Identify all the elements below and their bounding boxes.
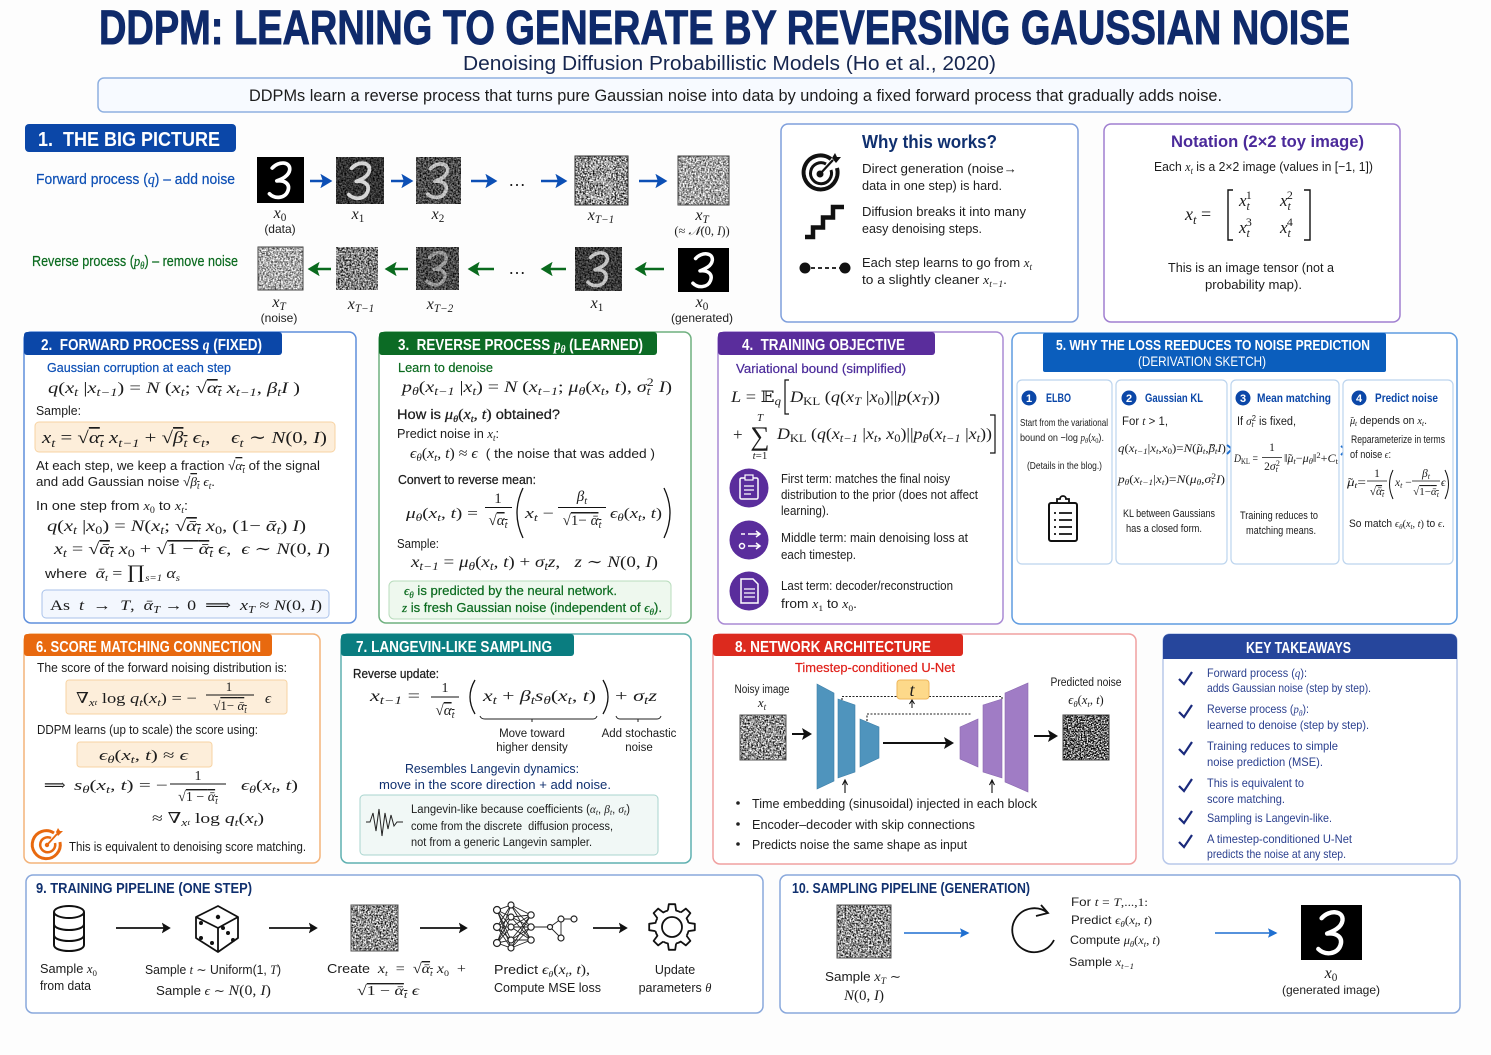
- text: each step keep: and add Gaussian noise √ βt ϵt.: [36, 474, 215, 491]
- label: generated x0: x0: [1324, 965, 1338, 984]
- heading: 10. SAMPLING PIPELINE (GENERATION): [792, 881, 1030, 897]
- text: predict and mse: [494, 963, 601, 995]
- text: score intro: The score of the forward noising distribution is:: [37, 661, 287, 675]
- card: ELBO: Start from the variational: [1020, 417, 1108, 429]
- card: ELBO: 1: [1026, 393, 1032, 405]
- brace: stochastic noise: [616, 716, 661, 722]
- reverse labels: [261, 294, 733, 325]
- text: sample t and epsilon: Sample t ∼ Uniform(1, T): [145, 963, 281, 977]
- text: reverse update: Reverse update:: [353, 667, 439, 681]
- heading: (DERIVATION SKETCH): [1138, 353, 1266, 369]
- summary banner: DDPMs learn a reverse process that turns pure Gaussian noise into data by undoing a fixed forward process that gradually adds noise.: [249, 86, 1222, 105]
- text: sample xT: Sample xT ∼: [825, 969, 901, 986]
- text: diffusion breaks: [862, 204, 1026, 236]
- heading: 4. TRAINING OBJECTIVE: [742, 337, 905, 354]
- equation: reverse mean: μθ(xt, t) =: [405, 506, 478, 524]
- icon: stairs: [805, 207, 844, 237]
- equation: variational bound: t=1: [753, 450, 767, 462]
- text: loop steps: Predict ϵθ(xt, t): [1071, 913, 1152, 929]
- subtitle: Denoising Diffusion Probabillistic Models (Ho et al., 2020): [463, 53, 996, 75]
- card: Gaussian KL: For t > 1,: [1122, 416, 1168, 428]
- matrix: xt1: [1238, 188, 1252, 213]
- reverse labels: x0: [695, 294, 709, 313]
- text: predict and mse: Compute MSE loss: [494, 981, 601, 995]
- text: direct generation: data in one step) is hard.: [862, 178, 1002, 193]
- icon: two dots dashed link: [800, 262, 850, 274]
- bullets: [736, 796, 1037, 852]
- reverse arrows: [310, 268, 664, 270]
- text: loop steps: Compute μθ(xt, t): [1070, 933, 1160, 949]
- equation: reverse mean: xt −: [524, 506, 554, 524]
- text: resembles langevin: Resembles Langevin dynamics:: [405, 761, 579, 776]
- heading: 6. SCORE MATCHING CONNECTION: [36, 639, 261, 656]
- arrow: card 2 to 3: [1227, 445, 1232, 454]
- text: sample x0: [40, 962, 98, 993]
- timestep box: [897, 680, 929, 700]
- text: diffusion breaks: Diffusion breaks it into many: [862, 204, 1026, 219]
- forward process label: Forward process (q) – add noise: [36, 171, 235, 188]
- forward labels: xT−1: [587, 207, 614, 226]
- card: mean matching: 1: [1269, 442, 1275, 454]
- card: mean matching: matching means.: [1246, 525, 1316, 537]
- reverse labels: xT−1: [347, 296, 374, 315]
- panel: 5. why the loss reduces: [1012, 333, 1457, 624]
- equation: update: + σ tz: [615, 688, 658, 707]
- panel: 1. the big picture: [25, 124, 733, 325]
- arrow: [420, 927, 466, 929]
- text: sample t and epsilon: Sample ϵ ∼ N(0, I): [156, 983, 271, 999]
- callout: langevin note: Langevin-like because coefficients (αt, βt, σt): [411, 804, 630, 817]
- question: how is mu obtained: How is μθ(xt, t) obtained?: [397, 407, 560, 425]
- callout: langevin note: come from the discrete diffusion process,: [411, 821, 613, 833]
- equation: alpha bar: where ᾱt = ∏ s=1 αs: [44, 562, 181, 583]
- takeaway list: predicts the noise at any step.: [1207, 847, 1346, 861]
- text: direct generation: [862, 161, 1017, 193]
- reverse labels: x1: [590, 295, 603, 314]
- label: stochastic noise: noise: [625, 742, 653, 754]
- card: mean matching: Mean matching: [1257, 391, 1331, 405]
- timestep box: t: [909, 680, 915, 700]
- text: create xt: [327, 962, 466, 1001]
- text: last term: [781, 579, 953, 613]
- icon: dice: [196, 906, 238, 952]
- heading: 9. TRAINING PIPELINE (ONE STEP): [36, 881, 252, 897]
- text: sample xT: N(0, I): [843, 988, 884, 1004]
- equation: variational bound: ∑: [750, 421, 770, 451]
- equation: variational bound: DKL (q(xt−1 |xt, x0)||pθ(xt−1 |xt)): [776, 426, 992, 445]
- card: Gaussian KL: KL between Gaussians: [1123, 508, 1215, 520]
- equation: marginal: q(xt |x0) = N(xt; √ ᾱt x0, (1− ᾱt) I): [47, 518, 306, 537]
- takeaway list: noise prediction (MSE).: [1207, 755, 1323, 769]
- icon: database: [54, 906, 84, 951]
- equation: reverse mean: √αt: [488, 513, 509, 531]
- icon: middle term arrows: [730, 520, 768, 560]
- panel: why this works: [781, 124, 1078, 322]
- bullets: Encoder–decoder with skip connections: [752, 817, 975, 832]
- text: middle term: Middle term: main denoising loss at: [781, 531, 968, 545]
- callout: sampling equation: [35, 422, 335, 452]
- bullets: Predicts noise the same shape as input: [752, 837, 967, 852]
- callout: limit: [42, 590, 329, 618]
- card: predict noise: μ˜ t=: [1346, 477, 1366, 490]
- card: mean matching: [1231, 380, 1339, 564]
- equation: reverse mean: [405, 488, 670, 538]
- callout: score formula: 1: [226, 679, 232, 694]
- takeaway list: adds Gaussian noise (step by step).: [1207, 681, 1371, 695]
- card: mean matching: 3: [1240, 393, 1246, 405]
- matrix: xt3: [1238, 215, 1252, 240]
- text: first term: [781, 472, 978, 518]
- text: image tensor note: probability map).: [1205, 277, 1302, 292]
- text: first term: distribution to the prior (does not affect: [781, 488, 978, 502]
- text: each xt: Each xt is a 2×2 image (values in [−1, 1]): [1154, 159, 1373, 176]
- callout: epsilon and z note: [389, 581, 671, 619]
- icon: last term document: [730, 572, 768, 610]
- equation: s theta: sθ(x t, t) = −: [74, 778, 168, 796]
- heading: why this works: Why this works?: [862, 131, 997, 152]
- text: each step: Each step learns to go from xt: [862, 255, 1032, 272]
- label: stochastic noise: [602, 728, 677, 754]
- equation: update: 1: [442, 681, 448, 696]
- card: mean matching: If σt2 is fixed,: [1237, 414, 1296, 429]
- label: predicted noise: ϵθ(xt, t): [1068, 693, 1104, 709]
- forward labels: (data): [264, 222, 296, 236]
- equation: reparameterised: xt = √ ᾱt x0 + √ 1 − ᾱt ϵ, ϵ ∼ N(0, I): [53, 541, 330, 560]
- heading: [713, 634, 963, 656]
- callout: score formula: [66, 679, 287, 715]
- card: Gaussian KL: has a closed form.: [1126, 523, 1202, 535]
- card: Gaussian KL: 2: [1126, 393, 1132, 405]
- generated image: [1301, 905, 1362, 960]
- heading: [1043, 333, 1386, 372]
- text: loop steps: [1069, 895, 1160, 971]
- text: ddpm learns: DDPM learns (up to scale) the score using:: [37, 723, 258, 737]
- heading: 2. FORWARD PROCESS q (FIXED): [41, 337, 262, 354]
- text: each step keep: [36, 458, 320, 491]
- text: each step keep: At each step, we keep a fraction √ αt of the signal: [36, 458, 320, 475]
- text: first term: learning).: [781, 504, 829, 518]
- forward arrows: [310, 180, 665, 182]
- heading: notation: Notation (2×2 toy image): [1171, 132, 1364, 151]
- reverse labels: xT: [271, 294, 286, 313]
- panel: 2. forward process: [24, 332, 356, 623]
- matrix: xt2: [1279, 188, 1293, 213]
- equation: s theta: [44, 769, 298, 829]
- panel: 9. training pipeline: [26, 875, 763, 1013]
- equation: p: pθ(xt−1 |xt) = N (xt−1; μθ(xt, t), σt2 I): [401, 377, 672, 398]
- matrix: xt4: [1279, 215, 1293, 240]
- panel: key takeaways: [1163, 634, 1457, 864]
- text: first term: First term: matches the final noisy: [781, 472, 951, 486]
- card: Gaussian KL: Gaussian KL: [1145, 391, 1203, 405]
- equation: s theta: ≈ ∇ xt log qt(xt): [152, 811, 264, 829]
- heading: 5. WHY THE LOSS REEDUCES TO NOISE PREDICTION: [1056, 338, 1370, 354]
- equation: reverse mean: ϵθ(xt, t): [610, 506, 662, 524]
- heading: 7. LANGEVIN-LIKE SAMPLING: [356, 639, 552, 656]
- panel: 6. score matching: [24, 634, 320, 863]
- equation: update: xt−1 =: [369, 688, 420, 707]
- text: sample t and epsilon: [145, 963, 281, 999]
- card: ELBO: (Details in the blog.): [1027, 460, 1102, 472]
- text: sample xT: [825, 969, 901, 1004]
- takeaway list: Training reduces to simple: [1207, 739, 1338, 753]
- text: update parameters: [639, 963, 711, 995]
- text: sample x0: from data: [40, 979, 91, 993]
- label: predicted noise: Predicted noise: [1050, 677, 1122, 689]
- arrow: [904, 932, 968, 934]
- equation: update: xt + β tsθ(xt, t): [482, 688, 596, 707]
- equation: reverse mean: βt: [576, 489, 588, 507]
- card: Gaussian KL: q(xt−1|xt,x0)=N(μ˜t,β˜tI): [1118, 443, 1226, 456]
- arrow: [1215, 932, 1276, 934]
- callout: sampling equation: xt = √ αt xt−1 + √ βt ϵt, ϵt ∼ N(0, I): [41, 428, 327, 450]
- card: mean matching: DKL =: [1233, 453, 1258, 466]
- equation: s theta: √1 − ᾱt: [178, 790, 218, 807]
- reverse labels: (noise): [261, 311, 297, 325]
- card: ELBO: ELBO: [1046, 391, 1071, 405]
- takeaway list: This is equivalent to: [1207, 776, 1304, 790]
- card: predict noise: 1: [1374, 468, 1380, 480]
- forward labels: xT: [694, 207, 709, 226]
- equation: s theta: ⟹: [44, 778, 66, 794]
- takeaway list: A timestep-conditioned U-Net: [1207, 832, 1353, 846]
- text: last term: Last term: decoder/reconstruction: [781, 579, 953, 593]
- text: predict noise: Predict noise in xt:: [397, 426, 499, 443]
- heading: 3. REVERSE PROCESS pθ (LEARNED): [398, 337, 643, 356]
- card: predict noise: of noise ϵ:: [1350, 449, 1391, 461]
- reverse process label: Reverse process (pθ) – remove noise: [32, 253, 238, 272]
- subheading: Timestep-conditioned U-Net: [795, 661, 956, 675]
- text: resembles langevin: move in the score direction + add noise.: [379, 777, 611, 792]
- card: predict noise: ϵ: [1441, 477, 1446, 489]
- label: move toward: higher density: [496, 742, 568, 754]
- icon: gear: [649, 904, 695, 950]
- callout: epsilon and z note: ϵθ is predicted by the neural network.: [404, 583, 617, 600]
- forward image sequence: [257, 156, 729, 205]
- text: resembles langevin: [379, 761, 611, 792]
- callout: score formula: ∇xt log qt(xt) = −: [76, 691, 197, 709]
- text: equivalent note: This is equivalent to denoising score matching.: [69, 840, 306, 854]
- equation: s theta: ϵθ(xt, t): [241, 778, 298, 796]
- panel: 10. sampling pipeline: [780, 875, 1460, 1013]
- card: ELBO: bound on −log pθ(x0).: [1020, 432, 1104, 445]
- callout: score formula: ϵ: [265, 691, 272, 707]
- label: generated x0: (generated image): [1282, 983, 1380, 997]
- equation: s theta: 1: [194, 769, 202, 784]
- label: noisy image: [734, 684, 790, 712]
- panel: 4. training objective: [718, 332, 1003, 624]
- noise image xT: [837, 905, 891, 958]
- card: predict noise: Predict noise: [1375, 391, 1438, 405]
- reverse ellipsis: …: [508, 258, 526, 278]
- forward labels: x2: [431, 206, 444, 225]
- callout: limit: As t → T, ᾱT → 0 ⟹ xT ≈ N(0, I): [50, 598, 322, 616]
- label: move toward: Move toward: [499, 728, 565, 740]
- forward labels: (≈ 𝒩(0, I)): [674, 224, 730, 238]
- icon: noise wave: [366, 809, 403, 836]
- arrow: [269, 927, 316, 929]
- equation: variational bound: T: [757, 412, 764, 424]
- text: create xt: Create xt = √ᾱt x0 +: [327, 962, 466, 978]
- card: Gaussian KL: [1116, 380, 1227, 564]
- callout: epsilon and z note: z is fresh Gaussian noise (independent of ϵθ).: [401, 600, 662, 617]
- text: direct generation: Direct generation (noise→: [862, 161, 1017, 176]
- text: in one step: In one step from x0 to xt:: [36, 498, 188, 515]
- icon: target: [804, 153, 841, 189]
- reverse labels: xT−2: [426, 296, 454, 315]
- encoder blocks: [817, 684, 879, 789]
- takeaway list: learned to denoise (step by step).: [1207, 718, 1369, 732]
- heading: the big picture: 1. THE BIG PICTURE: [38, 129, 220, 151]
- text: predict and mse: Predict ϵθ(xt, t),: [494, 963, 590, 979]
- panel: 8. network architecture: [713, 634, 1136, 864]
- text: loop steps: For t = T,...,1:: [1071, 895, 1148, 909]
- label: move toward: [496, 728, 568, 754]
- equation: reverse mean: √1− ᾱt: [563, 513, 602, 531]
- arrow: [116, 927, 169, 929]
- heading: KEY TAKEAWAYS: [1246, 640, 1351, 657]
- subheading: Variational bound (simplified): [736, 361, 906, 376]
- text: update parameters: Update: [655, 963, 695, 977]
- card: predict noise: βt: [1421, 468, 1431, 481]
- panel: notation: [1104, 124, 1400, 322]
- card: predict noise: √ᾱt: [1370, 485, 1385, 499]
- label: sample: Sample:: [397, 536, 439, 551]
- icon: clipboard: [1049, 496, 1077, 541]
- text: last term: from x1 to x0.: [781, 597, 857, 613]
- label: stochastic noise: Add stochastic: [602, 728, 677, 740]
- label: noisy image: xt: [757, 695, 767, 712]
- card: predict noise: 4: [1356, 393, 1363, 405]
- card: Gaussian KL: pθ(xt−1|xt)=N(μθ,σt2I): [1117, 472, 1225, 487]
- text: each step: to a slightly cleaner xt−1.: [862, 272, 1007, 289]
- subheading: Learn to denoise: [398, 360, 493, 375]
- icon: neural network: [494, 902, 577, 951]
- forward ellipsis: …: [508, 170, 526, 190]
- forward labels: x1: [351, 206, 364, 225]
- equation: sample: xt−1 = μθ(xt, t) + σtz, z ∼ N(0, I): [410, 554, 658, 573]
- equation: reverse mean: 1: [494, 491, 502, 507]
- card: predict noise: √1−ᾱt: [1413, 486, 1440, 499]
- text: create xt: √1 − ᾱt ϵ: [357, 984, 421, 1001]
- matrix: xt =: [1184, 204, 1211, 227]
- icon: loop arrow: [1012, 905, 1054, 952]
- panel: 3. reverse process: [379, 332, 691, 623]
- summary banner: [98, 78, 1352, 112]
- callout: score formula: √1− ᾱt: [213, 698, 247, 715]
- callout: langevin note: [360, 795, 658, 855]
- icon: orange target: [32, 828, 63, 859]
- card: mean matching: ‖μ˜t−μθ‖2+Ct: [1284, 451, 1339, 466]
- skip connections: [842, 696, 1002, 721]
- text: middle term: each timestep.: [781, 548, 856, 562]
- arrow: [593, 927, 626, 929]
- forward labels: x0: [273, 205, 287, 224]
- heading: [1163, 634, 1457, 659]
- noise image: [351, 905, 398, 951]
- heading: 8. NETWORK ARCHITECTURE: [735, 639, 931, 656]
- label: noisy image: Noisy image: [734, 684, 790, 696]
- text: image tensor note: This is an image tensor (not a: [1168, 260, 1335, 275]
- text: middle term: [781, 531, 968, 562]
- equation: q step: q(xt |xt−1 ) = N (xt; √ αt xt−1 , βtI ): [48, 380, 300, 399]
- callout: epsilon: [77, 742, 212, 767]
- arrows: [792, 700, 1056, 793]
- heading: [341, 634, 574, 656]
- equation: variational bound: [730, 380, 995, 462]
- equation: update: √αt: [435, 703, 456, 721]
- label: predicted noise: [1050, 677, 1122, 709]
- text: each step: [862, 255, 1032, 289]
- text: sample x0: Sample x0: [40, 962, 98, 978]
- matrix: [1184, 188, 1310, 240]
- equation: update: [369, 680, 658, 721]
- label: generated x0: [1282, 965, 1380, 997]
- text: update parameters: parameters θ: [639, 981, 711, 995]
- subheading: Gaussian corruption at each step: [47, 360, 231, 375]
- card: mean matching: 2σt2: [1264, 459, 1280, 474]
- equation: epsilon approx: ϵθ(xt, t) ≈ ϵ ( the noise that was added ): [410, 446, 655, 464]
- callout: langevin note: not from a generic Langevin sampler.: [411, 837, 592, 849]
- heading: [24, 332, 282, 355]
- card: predict noise: So match ϵθ(xt, t) to ϵ.: [1349, 518, 1445, 531]
- card: ELBO: [1017, 380, 1112, 564]
- icon: first term clipboard: [730, 468, 768, 508]
- card: predict noise: μ˜t depends on xt.: [1349, 415, 1427, 428]
- output noise image: [1063, 715, 1109, 760]
- noisy input image: [740, 715, 786, 760]
- takeaway list: Forward process (q):: [1207, 666, 1307, 680]
- takeaway list: Sampling is Langevin-like.: [1207, 811, 1332, 825]
- callout: epsilon: ϵθ(xt, t) ≈ ϵ: [99, 748, 189, 766]
- card: mean matching: Training reduces to: [1240, 510, 1318, 522]
- label: sample: Sample:: [36, 403, 81, 418]
- equation: variational bound: +: [733, 425, 743, 444]
- equation: variational bound: L = 𝔼 q: [730, 389, 781, 408]
- heading: [718, 332, 935, 355]
- takeaway list: Reverse process (pθ):: [1207, 702, 1309, 718]
- equation: variational bound: DKL (q(xT |x0)||p(xT)): [789, 389, 940, 408]
- bullets: Time embedding (sinusoidal) injected in each block: [752, 796, 1037, 811]
- takeaway list: score matching.: [1207, 792, 1285, 806]
- arrow: card 3 to 4: [1341, 446, 1346, 455]
- text: loop steps: Sample xt−1: [1069, 955, 1134, 971]
- card: predict noise: [1343, 380, 1453, 564]
- forward labels: [264, 205, 730, 238]
- card: predict noise: xt −: [1394, 477, 1412, 490]
- heading: [24, 634, 272, 656]
- card: predict noise: Reparameterize in terms: [1351, 434, 1445, 446]
- text: diffusion breaks: easy denoising steps.: [862, 221, 982, 236]
- reverse labels: (generated): [671, 311, 733, 325]
- check marks: [1179, 672, 1192, 847]
- takeaway list: [1207, 666, 1371, 861]
- text: convert: Convert to reverse mean:: [398, 472, 536, 487]
- reverse image sequence: [258, 247, 729, 292]
- decoder blocks: [960, 683, 1028, 792]
- brace: move toward: [480, 716, 597, 722]
- text: image tensor note: [1168, 260, 1335, 292]
- panel: 7. langevin: [341, 634, 691, 863]
